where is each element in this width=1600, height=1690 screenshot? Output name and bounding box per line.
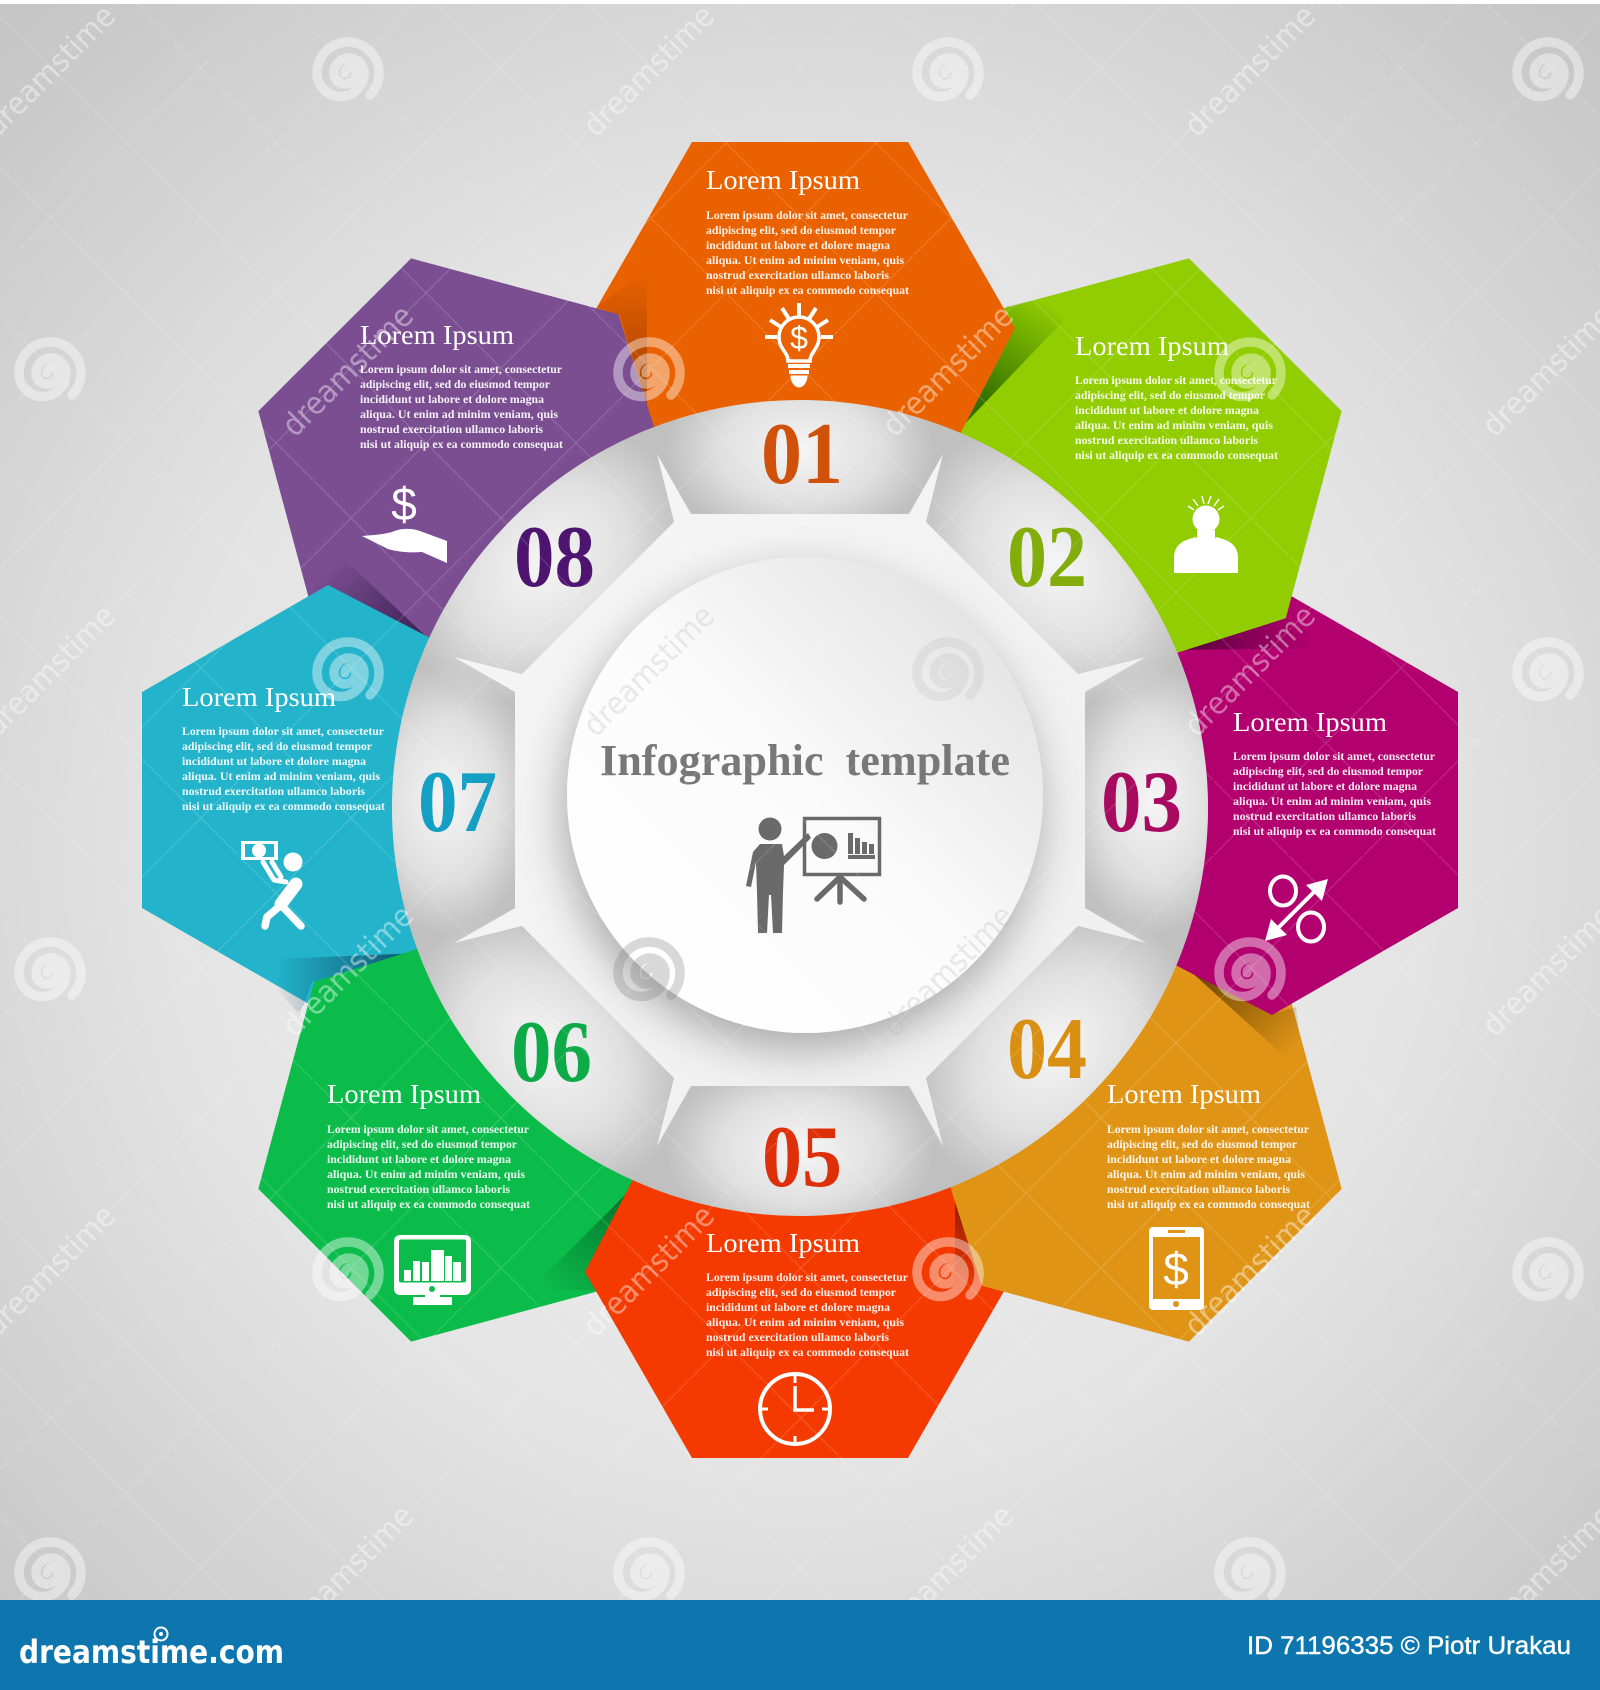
text block 01: adipiscing elit, sed do eiusmod tempor bbox=[706, 223, 897, 237]
text block 07: adipiscing elit, sed do eiusmod tempor bbox=[182, 739, 373, 753]
footer bar bbox=[0, 1600, 1600, 1690]
text block 05: Lorem Ipsum bbox=[706, 1228, 860, 1258]
text block 01: Lorem Ipsum bbox=[706, 165, 860, 195]
outer ring bbox=[392, 400, 1208, 1216]
number 03: 03 bbox=[1101, 754, 1182, 851]
text block 04: nisi ut aliquip ex ea commodo consequat bbox=[1107, 1197, 1310, 1211]
text block 05: nisi ut aliquip ex ea commodo consequat bbox=[706, 1345, 909, 1359]
panel 01 overlap: orange right half over lime bbox=[800, 142, 1015, 440]
text block 08: Lorem Ipsum bbox=[360, 320, 514, 350]
text block 01: aliqua. Ut enim ad minim veniam, quis bbox=[706, 253, 904, 267]
text block 02: Lorem Ipsum bbox=[1075, 331, 1229, 361]
watermark wordmarks: dreamstime bbox=[1177, 598, 1323, 744]
text block 02: adipiscing elit, sed do eiusmod tempor bbox=[1075, 388, 1266, 402]
footer image id and credit: ID 71196335 © Piotr Urakau bbox=[1247, 1632, 1571, 1660]
text block 05: incididunt ut labore et dolore magna bbox=[706, 1300, 890, 1314]
icon: person with bulb head bbox=[1174, 496, 1238, 573]
icon: clock bbox=[760, 1374, 830, 1444]
text block 02 bbox=[1075, 331, 1278, 462]
watermark wordmarks: dreamstime bbox=[875, 1498, 1021, 1644]
text block 03: Lorem Ipsum bbox=[1233, 707, 1387, 737]
icon: presenter with chart board bbox=[746, 818, 880, 933]
watermark wordmarks: dreamstime bbox=[576, 1198, 722, 1344]
text block 02: nostrud exercitation ullamco laboris bbox=[1075, 433, 1258, 447]
panel 08 base: purple hexagon bbox=[183, 183, 697, 697]
text block 06: incididunt ut labore et dolore magna bbox=[327, 1152, 511, 1166]
text block 01: incididunt ut labore et dolore magna bbox=[706, 238, 890, 252]
text block 04: adipiscing elit, sed do eiusmod tempor bbox=[1107, 1137, 1298, 1151]
text block 06: Lorem ipsum dolor sit amet, consectetur bbox=[327, 1122, 530, 1136]
text block 03: Lorem ipsum dolor sit amet, consectetur bbox=[1233, 749, 1436, 763]
number 01: 01 bbox=[761, 406, 843, 503]
number 02: 02 bbox=[1007, 509, 1087, 606]
watermark wordmarks: dreamstime bbox=[1177, 1198, 1323, 1344]
panel 07 base: cyan hexagon bbox=[142, 585, 440, 1015]
text block 03 bbox=[1233, 707, 1436, 838]
text block 03: incididunt ut labore et dolore magna bbox=[1233, 779, 1417, 793]
number 08: 08 bbox=[514, 509, 595, 606]
panel 04 base: amber hexagon bbox=[903, 903, 1417, 1417]
text block 08: Lorem ipsum dolor sit amet, consectetur bbox=[360, 362, 563, 376]
text block 02: Lorem ipsum dolor sit amet, consectetur bbox=[1075, 373, 1278, 387]
text block 07: incididunt ut labore et dolore magna bbox=[182, 754, 366, 768]
icon: hand holding dollar: $ bbox=[391, 478, 417, 530]
watermark wordmarks: dreamstime bbox=[275, 298, 421, 444]
icon: monitor with bars bbox=[394, 1235, 471, 1305]
watermark wordmarks: dreamstime bbox=[275, 898, 421, 1044]
icon: man lifting banknote bbox=[241, 841, 302, 926]
text block 01: nostrud exercitation ullamco laboris bbox=[706, 268, 889, 282]
text block 08: aliqua. Ut enim ad minim veniam, quis bbox=[360, 407, 558, 421]
inner octagon plate with spikes bbox=[454, 454, 1146, 1146]
text block 08 bbox=[360, 320, 563, 451]
panel 02 base: lime hexagon bbox=[903, 183, 1417, 697]
number 07: 07 bbox=[418, 754, 497, 851]
text block 05: Lorem ipsum dolor sit amet, consectetur bbox=[706, 1270, 909, 1284]
number 06: 06 bbox=[511, 1004, 592, 1101]
text block 04: aliqua. Ut enim ad minim veniam, quis bbox=[1107, 1167, 1305, 1181]
text block 06: adipiscing elit, sed do eiusmod tempor bbox=[327, 1137, 518, 1151]
text block 06: nisi ut aliquip ex ea commodo consequat bbox=[327, 1197, 530, 1211]
text block 07: nostrud exercitation ullamco laboris bbox=[182, 784, 365, 798]
text block 07: Lorem ipsum dolor sit amet, consectetur bbox=[182, 724, 385, 738]
text block 07: Lorem Ipsum bbox=[182, 682, 336, 712]
text block 04: Lorem ipsum dolor sit amet, consectetur bbox=[1107, 1122, 1310, 1136]
text block 02: nisi ut aliquip ex ea commodo consequat bbox=[1075, 448, 1278, 462]
watermark wordmarks: dreamstime bbox=[576, 598, 722, 744]
text block 08: incididunt ut labore et dolore magna bbox=[360, 392, 544, 406]
watermark wordmarks: dreamstime bbox=[875, 298, 1021, 444]
text block 01: Lorem ipsum dolor sit amet, consectetur bbox=[706, 208, 909, 222]
text block 03: adipiscing elit, sed do eiusmod tempor bbox=[1233, 764, 1424, 778]
text block 03: nisi ut aliquip ex ea commodo consequat bbox=[1233, 824, 1436, 838]
panel 01 base: orange hexagon bbox=[585, 142, 1015, 440]
text block 08: adipiscing elit, sed do eiusmod tempor bbox=[360, 377, 551, 391]
text block 01: nisi ut aliquip ex ea commodo consequat bbox=[706, 283, 909, 297]
watermark wordmarks: dreamstime bbox=[275, 1498, 421, 1644]
text block 08: nisi ut aliquip ex ea commodo consequat bbox=[360, 437, 563, 451]
text block 05: nostrud exercitation ullamco laboris bbox=[706, 1330, 889, 1344]
text block 04 bbox=[1107, 1079, 1310, 1211]
icon: percent with double arrow bbox=[1265, 876, 1328, 942]
centre title: Infographic template bbox=[600, 736, 1010, 785]
text block 05: adipiscing elit, sed do eiusmod tempor bbox=[706, 1285, 897, 1299]
text block 03: aliqua. Ut enim ad minim veniam, quis bbox=[1233, 794, 1431, 808]
number 05: 05 bbox=[762, 1109, 842, 1206]
text block 03: nostrud exercitation ullamco laboris bbox=[1233, 809, 1416, 823]
text block 02: incididunt ut labore et dolore magna bbox=[1075, 403, 1259, 417]
text block 05 bbox=[706, 1228, 909, 1359]
icon: hand holding dollar bbox=[362, 478, 447, 563]
icon: smartphone with dollar bbox=[1149, 1227, 1204, 1310]
text block 06: aliqua. Ut enim ad minim veniam, quis bbox=[327, 1167, 525, 1181]
panel 05 base: red hexagon bbox=[585, 1160, 1015, 1458]
text block 06: nostrud exercitation ullamco laboris bbox=[327, 1182, 510, 1196]
centre circle bbox=[567, 557, 1043, 1033]
icon: smartphone with dollar: $ bbox=[1163, 1243, 1189, 1295]
footer logo: dreamstime.com bbox=[19, 1633, 284, 1671]
panel 06 base: green hexagon bbox=[183, 903, 697, 1417]
text block 04: Lorem Ipsum bbox=[1107, 1079, 1261, 1109]
text block 07 bbox=[182, 682, 385, 813]
icon: light bulb with dollar bbox=[765, 303, 833, 387]
text block 02: aliqua. Ut enim ad minim veniam, quis bbox=[1075, 418, 1273, 432]
text block 06: Lorem Ipsum bbox=[327, 1079, 481, 1109]
panel 03 base: magenta hexagon bbox=[1160, 585, 1458, 1015]
icon: light bulb with dollar: $ bbox=[790, 320, 808, 356]
number 04: 04 bbox=[1007, 1001, 1087, 1098]
watermark wordmarks: dreamstime bbox=[875, 898, 1021, 1044]
text block 05: aliqua. Ut enim ad minim veniam, quis bbox=[706, 1315, 904, 1329]
text block 01 bbox=[706, 165, 909, 297]
text block 07: aliqua. Ut enim ad minim veniam, quis bbox=[182, 769, 380, 783]
text block 06 bbox=[327, 1079, 530, 1211]
text block 04: incididunt ut labore et dolore magna bbox=[1107, 1152, 1291, 1166]
text block 08: nostrud exercitation ullamco laboris bbox=[360, 422, 543, 436]
text block 07: nisi ut aliquip ex ea commodo consequat bbox=[182, 799, 385, 813]
text block 04: nostrud exercitation ullamco laboris bbox=[1107, 1182, 1290, 1196]
